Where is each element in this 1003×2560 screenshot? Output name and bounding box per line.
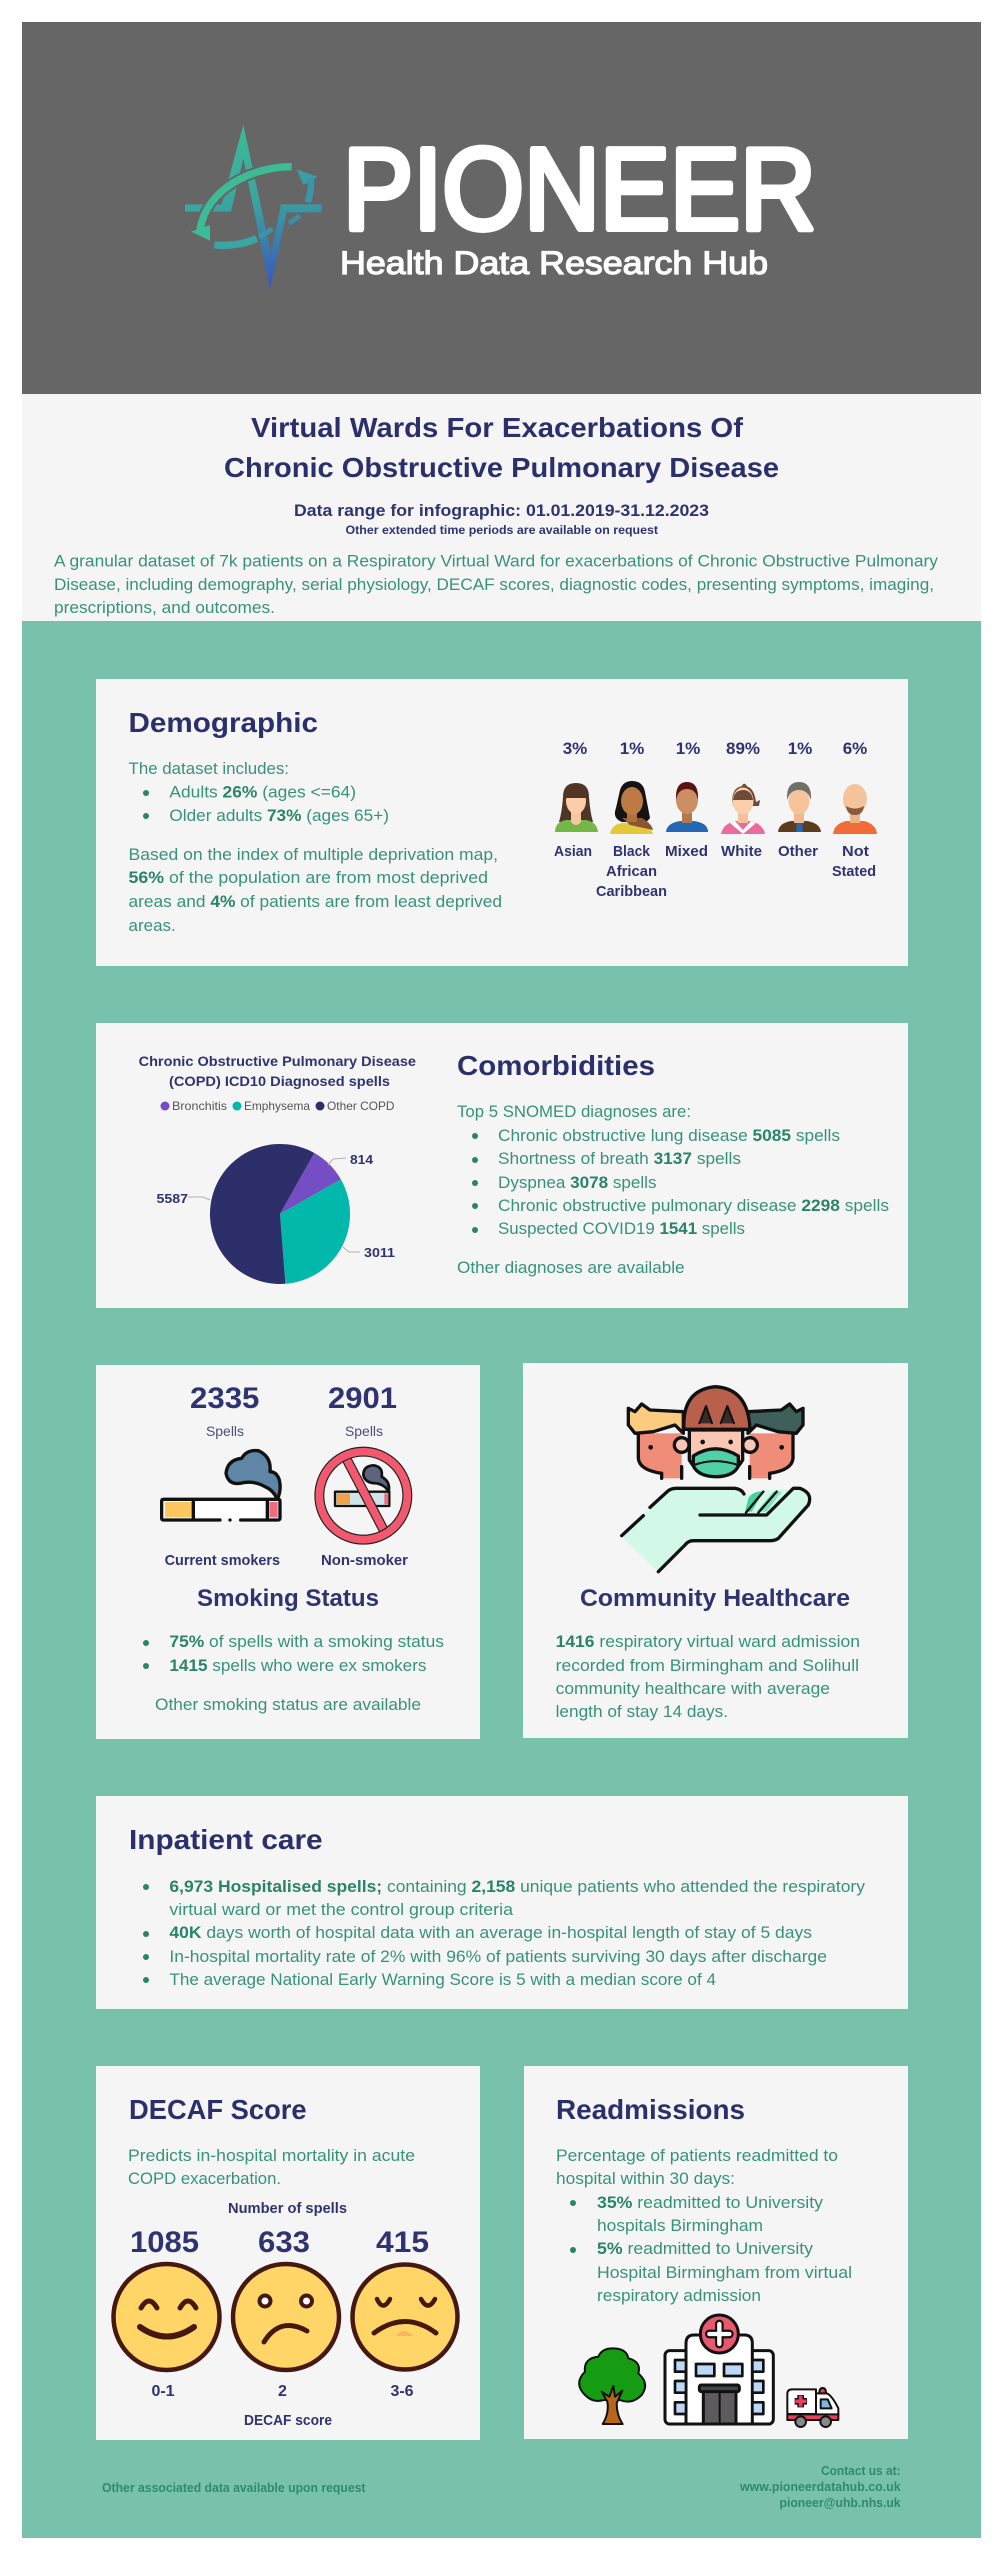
ethnicity percentages: 1% (620, 739, 644, 758)
age text: Adults 26% (ages <=64) (169, 783, 356, 802)
inpatient list (143, 1877, 866, 1989)
icon: worried face (233, 2264, 339, 2370)
intro text: prescriptions, and outcomes. (54, 598, 275, 617)
DECAF score ranges: 2 (278, 2383, 287, 2400)
smoking text: 1415 spells who were ex smokers (169, 1656, 426, 1675)
DECAF counts: 633 (258, 2226, 310, 2259)
ethnicity percentages: 3% (563, 739, 587, 758)
deprivation text: areas. (128, 916, 176, 935)
logo icon (185, 125, 322, 290)
icon: happy face (114, 2264, 220, 2370)
panel: inpatient care (96, 1796, 908, 2009)
DECAF counts: 415 (376, 2226, 429, 2259)
icon: sad face (352, 2264, 458, 2370)
readmissions text: 5% readmitted to University (597, 2239, 814, 2258)
DECAF counts (130, 2226, 429, 2259)
icon: white person (721, 784, 765, 834)
smoking counts: 2335 (190, 1382, 259, 1415)
ethnicity labels: Not (842, 843, 869, 860)
inpatient list: 40K days worth of hospital data with an average in-hospital length of stay of 5 days (169, 1923, 812, 1942)
icon: no smoking (319, 1452, 407, 1540)
pie chart legend: Bronchitis (172, 1099, 227, 1113)
panel: DECAF score (96, 2066, 480, 2440)
DECAF description: Predicts in-hospital mortality in acute (128, 2146, 415, 2165)
intro text: A granular dataset of 7k patients on a Respiratory Virtual Ward for exacerbations of Chronic Obstructive Pulmonary (54, 552, 939, 570)
readmissions text: respiratory admission (597, 2286, 761, 2305)
contact details: Contact us at: (821, 2463, 901, 2478)
pie chart title: (COPD) ICD10 Diagnosed spells (169, 1073, 390, 1089)
heading: comorbidities: Comorbidities (457, 1050, 655, 1081)
panel: demographic (96, 679, 908, 966)
ethnicity percentages: 1% (676, 739, 700, 758)
smoking counts: 2901 (328, 1382, 397, 1415)
ethnicity labels: White (721, 843, 762, 860)
deprivation text: Based on the index of multiple deprivation map, (128, 845, 498, 864)
icon: tree, hospital and ambulance (579, 2315, 838, 2427)
heading: community healthcare: Community Healthcare (580, 1585, 850, 1612)
smoking labels (165, 1552, 408, 1569)
icon: black african caribbean person (610, 781, 653, 834)
title (224, 412, 779, 483)
data range: Other extended time periods are available on request (346, 523, 658, 537)
logo wordmark: PIONEER (343, 124, 816, 254)
pie chart: 5587 (156, 1191, 188, 1206)
readmissions text (556, 2146, 852, 2305)
ethnicity percentages: 6% (843, 739, 867, 758)
ethnicity labels: Other (778, 843, 818, 860)
contact details: pioneer@uhb.nhs.uk (780, 2495, 901, 2510)
pie chart title: Chronic Obstructive Pulmonary Disease (139, 1053, 416, 1069)
pie chart legend: Other COPD (327, 1099, 395, 1113)
inpatient list: The average National Early Warning Score is 5 with a median score of 4 (169, 1970, 716, 1989)
DECAF score ranges (151, 2383, 414, 2400)
diagnoses list: Suspected COVID19 1541 spells (498, 1219, 745, 1238)
community text: 1416 respiratory virtual ward admission (556, 1632, 860, 1651)
intro text (54, 552, 939, 617)
DECAF description (128, 2146, 415, 2188)
DECAF description: COPD exacerbation. (128, 2169, 281, 2188)
footer note: Other associated data available upon request (102, 2480, 366, 2495)
ethnicity percentages (563, 739, 867, 758)
ethnicity labels: Stated (832, 863, 876, 880)
ethnicity labels: Mixed (665, 843, 708, 860)
ethnicity percentages: 89% (726, 739, 760, 758)
pie chart title (139, 1053, 416, 1089)
icon: people in caring hand (621, 1387, 810, 1572)
heading: inpatient care: Inpatient care (129, 1824, 323, 1855)
heading: demographic: Demographic (128, 707, 318, 738)
icon: mixed person (666, 782, 708, 832)
contact details (739, 2463, 901, 2510)
smoking counts (190, 1382, 397, 1439)
pie chart: 814 (350, 1152, 374, 1167)
diagnoses list: Chronic obstructive pulmonary disease 2298 spells (498, 1196, 889, 1215)
panel: community healthcare (523, 1363, 908, 1738)
age text: The dataset includes: (128, 759, 289, 778)
inpatient list: In-hospital mortality rate of 2% with 96% of patients surviving 30 days after discharge (169, 1947, 827, 1966)
inpatient list: virtual ward or met the control group criteria (169, 1900, 514, 1919)
community text: community healthcare with average (556, 1679, 830, 1698)
pie chart legend: Emphysema (244, 1099, 310, 1113)
icon: not stated person (833, 784, 877, 834)
title: Virtual Wards For Exacerbations Of (251, 412, 744, 443)
deprivation text: areas and 4% of patients are from least deprived (128, 892, 502, 911)
pie chart: 3011 (364, 1245, 395, 1260)
heading: smoking status: Smoking Status (197, 1585, 379, 1612)
diagnoses list (457, 1102, 889, 1277)
number of spells label: Number of spells (228, 2200, 347, 2217)
heading: readmissions: Readmissions (556, 2094, 745, 2125)
pie chart legend (160, 1099, 395, 1113)
ethnicity labels: Black (613, 843, 651, 860)
icon: other person (778, 782, 821, 832)
smoking text: Other smoking status are available (155, 1695, 421, 1714)
age text (128, 759, 389, 825)
data range (294, 501, 709, 537)
deprivation text: 56% of the population are from most deprived (128, 868, 488, 887)
community text (556, 1632, 860, 1721)
readmissions text: hospital within 30 days: (556, 2169, 735, 2188)
community text: length of stay 14 days. (556, 1702, 728, 1721)
icon: asian person (555, 783, 598, 832)
age text: Older adults 73% (ages 65+) (169, 806, 389, 825)
deprivation text (128, 845, 502, 935)
diagnoses list: Other diagnoses are available (457, 1258, 685, 1277)
smoking text: 75% of spells with a smoking status (169, 1632, 444, 1651)
ethnicity percentages: 1% (788, 739, 812, 758)
diagnoses list: Dyspnea 3078 spells (498, 1173, 656, 1192)
heading: DECAF score: DECAF Score (129, 2094, 307, 2125)
smoking text (143, 1632, 444, 1714)
header banner (22, 22, 981, 394)
panel: readmissions (524, 2066, 908, 2439)
community text: recorded from Birmingham and Solihull (556, 1656, 859, 1675)
readmissions text: 35% readmitted to University (597, 2193, 824, 2212)
readmissions text: hospitals Birmingham (597, 2216, 763, 2235)
smoking counts: Spells (206, 1423, 244, 1439)
DECAF axis label: DECAF score (244, 2412, 332, 2429)
pie chart (156, 1144, 395, 1284)
panel: comorbidities (96, 1023, 908, 1308)
ethnicity labels: African (606, 863, 657, 880)
readmissions text: Percentage of patients readmitted to (556, 2146, 838, 2165)
ethnicity labels: Asian (554, 843, 592, 860)
contact details: www.pioneerdatahub.co.uk (739, 2479, 901, 2494)
diagnoses list: Chronic obstructive lung disease 5085 spells (498, 1126, 840, 1145)
title: Chronic Obstructive Pulmonary Disease (224, 452, 779, 483)
smoking counts: Spells (345, 1423, 383, 1439)
ethnicity labels: Caribbean (596, 883, 667, 900)
panel: smoking status (96, 1365, 480, 1739)
intro text: Disease, including demography, serial physiology, DECAF scores, diagnostic codes, presenting symptoms, imaging, (54, 575, 934, 594)
DECAF score ranges: 0-1 (151, 2383, 175, 2400)
inpatient list: 6,973 Hospitalised spells; containing 2,158 unique patients who attended the respiratory (169, 1877, 866, 1896)
logo subtitle: Health Data Research Hub (340, 245, 768, 281)
data range: Data range for infographic: 01.01.2019-31.12.2023 (294, 501, 709, 520)
diagnoses list: Shortness of breath 3137 spells (498, 1149, 741, 1168)
DECAF counts: 1085 (130, 2226, 199, 2259)
DECAF score ranges: 3-6 (390, 2383, 414, 2400)
intro panel (22, 394, 981, 621)
teal background (22, 621, 981, 2538)
icon: cigarette (162, 1450, 280, 1520)
readmissions text: Hospital Birmingham from virtual (597, 2263, 852, 2282)
ethnicity labels (554, 843, 876, 900)
diagnoses list: Top 5 SNOMED diagnoses are: (457, 1102, 691, 1121)
smoking labels: Current smokers (165, 1552, 280, 1569)
smoking labels: Non-smoker (321, 1552, 408, 1569)
